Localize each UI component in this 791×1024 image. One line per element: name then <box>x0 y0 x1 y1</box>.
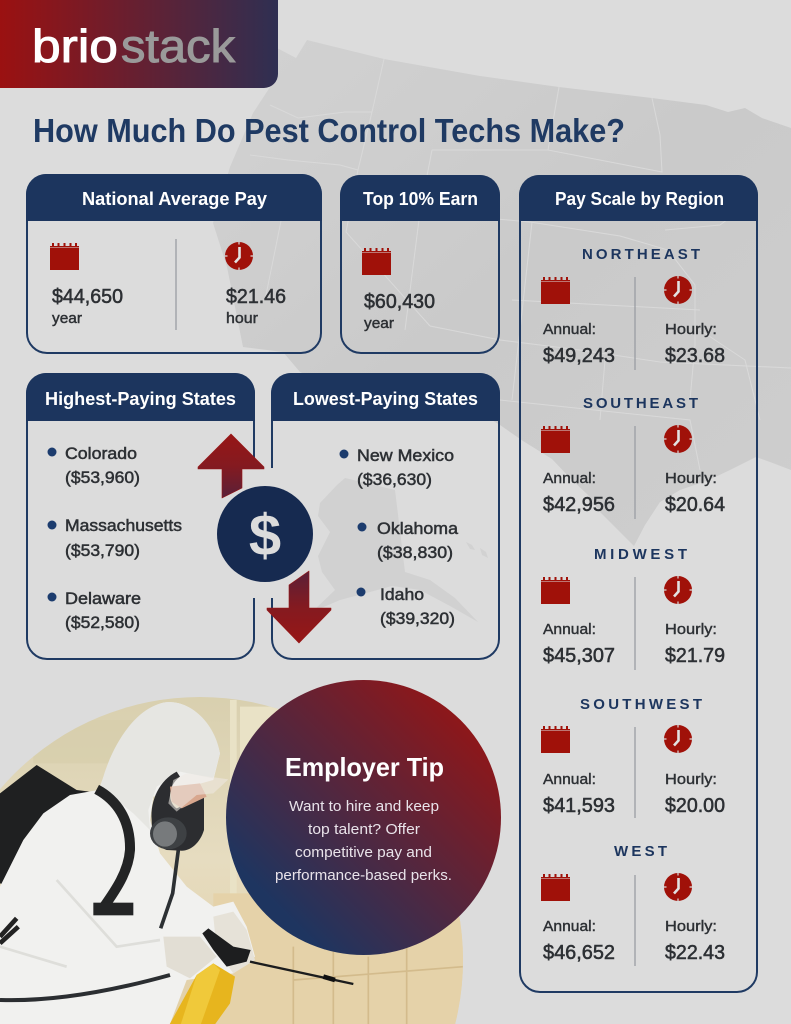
region: West: Annual: <box>543 918 596 935</box>
state: Massachusetts: Massachusetts <box>65 517 182 535</box>
state: Delaware: Delaware <box>65 590 141 608</box>
region: Southwest: Annual: <box>543 771 596 788</box>
icon: dollar coin <box>217 486 313 582</box>
state: Colorado: Colorado <box>65 445 137 463</box>
state: Oklahoma: Oklahoma <box>377 520 459 538</box>
callout: employer tip <box>226 680 501 955</box>
region: Southwest <box>541 696 725 818</box>
region: Northeast: $49,243 <box>543 345 615 367</box>
state: Idaho: Idaho <box>380 586 424 604</box>
arrow: up <box>198 434 264 498</box>
panel: highest-paying states: Highest-Paying States <box>45 388 236 409</box>
panel: national average pay <box>26 174 322 353</box>
top 10 percent pay: $60,430 <box>364 291 435 313</box>
region: Northeast <box>541 246 725 370</box>
callout body: top talent? Offer <box>308 822 420 838</box>
annual unit: year <box>52 310 82 327</box>
state: Idaho: ($39,320) <box>380 610 455 628</box>
state: New Mexico: New Mexico <box>357 447 454 465</box>
region: Southwest: SOUTHWEST <box>580 696 702 713</box>
icon: calendar <box>50 243 79 270</box>
panel: pay scale by region <box>519 175 758 992</box>
region: West: Hourly: <box>665 918 717 935</box>
hourly national pay: $21.46 <box>226 286 286 308</box>
top 10 percent unit: year <box>364 315 394 332</box>
header: national average pay <box>26 174 322 221</box>
icon: calendar <box>362 248 391 275</box>
callout body <box>275 799 452 884</box>
panel: highest-paying states <box>26 373 255 659</box>
region: Midwest: Hourly: <box>665 621 717 638</box>
header: lowest-paying states <box>271 373 500 421</box>
icon: clock <box>225 242 253 270</box>
state: Oklahoma <box>358 520 459 562</box>
state: Massachusetts: ($53,790) <box>65 542 140 560</box>
panel: top 10% earn: Top 10% Earn <box>363 188 478 209</box>
state: New Mexico: ($36,630) <box>357 471 432 489</box>
panel: national average pay: National Average Pay <box>82 188 268 209</box>
state: Colorado <box>48 445 140 487</box>
region: Southwest: $41,593 <box>543 795 615 817</box>
callout body: performance-based perks. <box>275 868 452 884</box>
region: Southwest: Hourly: <box>665 771 717 788</box>
panel: top 10% earn <box>340 175 500 353</box>
region: Midwest: $45,307 <box>543 645 615 667</box>
background map of the United States <box>213 40 791 622</box>
region: Northeast: Hourly: <box>665 321 717 338</box>
region: Southwest: $20.00 <box>665 795 725 817</box>
hourly unit: hour <box>226 310 258 327</box>
state: Colorado: ($53,960) <box>65 469 140 487</box>
callout heading: Employer Tip <box>285 752 444 782</box>
region: Southeast: $42,956 <box>543 494 615 516</box>
state: New Mexico <box>340 447 454 489</box>
panel: lowest-paying states <box>271 373 500 659</box>
region: Midwest: Annual: <box>543 621 596 638</box>
state: Delaware: ($52,580) <box>65 614 140 632</box>
region: Midwest: $21.79 <box>665 645 725 667</box>
logo banner: brio <box>32 20 118 72</box>
header: pay scale by region <box>519 175 758 221</box>
region: Northeast: NORTHEAST <box>582 246 700 263</box>
state: Idaho <box>356 586 455 628</box>
region: Northeast: $23.68 <box>665 345 725 367</box>
dollar badge with arrows <box>198 434 331 643</box>
panel: pay scale by region: Pay Scale by Region <box>555 188 724 209</box>
state: Massachusetts <box>48 517 182 560</box>
callout body: Want to hire and keep <box>289 799 439 815</box>
arrow: down <box>267 571 331 643</box>
callout body: competitive pay and <box>295 845 432 861</box>
header: highest-paying states <box>26 373 255 421</box>
region: West: $46,652 <box>543 942 615 964</box>
panel: lowest-paying states: Lowest-Paying States <box>293 388 478 409</box>
region: Southeast: Annual: <box>543 470 596 487</box>
icon: dollar coin: $ <box>249 503 281 568</box>
region: Midwest: MIDWEST <box>594 546 687 563</box>
title: How Much Do Pest Control Techs Make? <box>33 112 625 149</box>
worker photo <box>0 690 470 1024</box>
region: Southeast: $20.64 <box>665 494 725 516</box>
region: West: $22.43 <box>665 942 725 964</box>
annual national pay: $44,650 <box>52 286 123 308</box>
region: West <box>541 843 725 966</box>
state: Oklahoma: ($38,830) <box>377 544 453 562</box>
region: Northeast: Annual: <box>543 321 596 338</box>
header: top 10% earn <box>340 175 500 221</box>
region: West: WEST <box>614 843 667 860</box>
region: Midwest <box>541 546 725 670</box>
region: Southeast: SOUTHEAST <box>583 395 698 412</box>
logo banner: stack <box>121 20 236 72</box>
region: Southeast: Hourly: <box>665 470 717 487</box>
region: Southeast <box>541 395 725 519</box>
state: Delaware <box>48 590 141 632</box>
logo banner <box>0 0 278 88</box>
